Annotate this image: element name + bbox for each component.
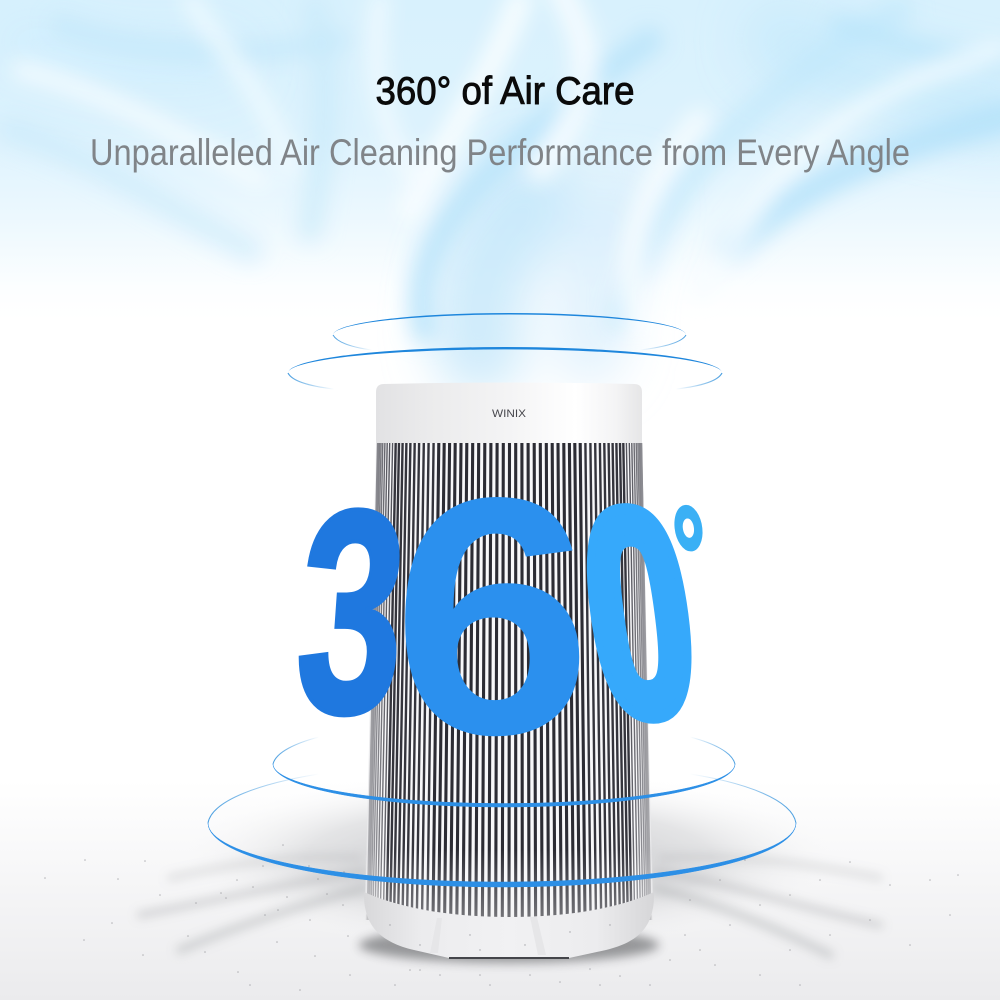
title: 360° of Air Care [376, 70, 634, 113]
digit 3: 3 [288, 451, 416, 775]
base foot [449, 957, 569, 959]
digit 6: 6 [392, 427, 592, 805]
air purifier [364, 382, 654, 958]
floor with shadow streaks [0, 770, 1000, 1000]
degree mark: ° [667, 479, 716, 634]
WINIX logo: WINIX [492, 408, 527, 420]
purifier base [364, 892, 654, 958]
floor dust specks [45, 845, 958, 990]
lower ring, lower [208, 774, 796, 887]
top ring, lower [288, 347, 722, 389]
big 360 degree numeral [288, 427, 716, 805]
subtitle: Unparalleled Air Cleaning Performance from Every Angle [90, 132, 910, 173]
purifier grille body [365, 443, 653, 925]
purifier top cap [376, 382, 642, 443]
digit 0: 0 [565, 448, 714, 778]
top ring, upper [333, 313, 686, 350]
base air vents [430, 917, 546, 955]
background: blue air swirl [0, 0, 1000, 350]
lower ring, upper [273, 737, 735, 807]
specks on base [390, 925, 610, 950]
